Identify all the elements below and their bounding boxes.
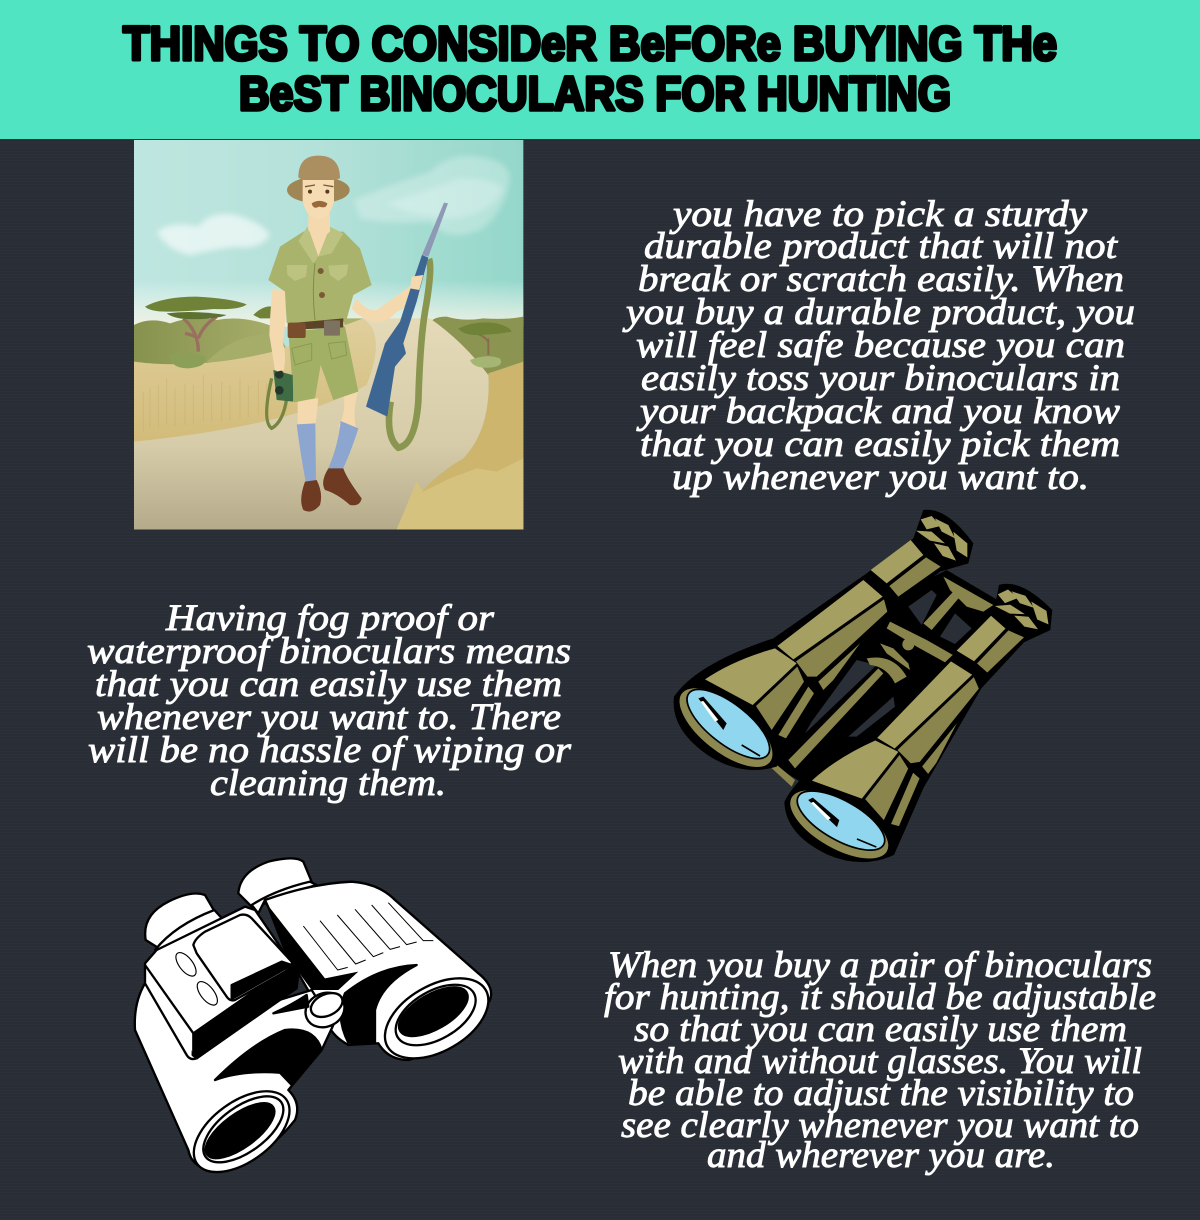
neck and head	[308, 213, 330, 242]
text block: fog proof and waterproof: that you can easily use them	[95, 664, 562, 705]
trees	[145, 297, 512, 368]
legs	[298, 392, 358, 432]
bridge	[770, 570, 1003, 783]
text block: durability: that you can easily pick them	[640, 424, 1120, 465]
shorts	[288, 327, 358, 402]
right lens	[371, 962, 502, 1075]
clouds	[157, 156, 510, 255]
text block: durability	[622, 194, 1135, 498]
title: THINGS TO CONSIDeR BeFORe BUYING THe	[123, 18, 1057, 71]
text block: fog proof and waterproof	[87, 598, 572, 804]
text block: fog proof and waterproof: Having fog proof or	[165, 598, 495, 639]
text block: adjustable: for hunting, it should be adjustable	[604, 977, 1156, 1018]
man	[267, 156, 448, 512]
text block: adjustable: so that you can easily use them	[634, 1009, 1127, 1050]
focus knob	[300, 986, 350, 1034]
shirt	[268, 232, 372, 323]
grass left	[134, 318, 376, 447]
boots	[301, 468, 362, 512]
text block: durability: you buy a durable product, you	[622, 292, 1135, 333]
text block: durability: will feel safe because you can	[636, 325, 1125, 366]
text block: adjustable: see clearly whenever you want to	[621, 1105, 1139, 1146]
belt and pouch	[288, 318, 343, 330]
illustration: hunter on a savanna path	[134, 140, 524, 530]
text block: durability: durable product that will not	[644, 226, 1119, 267]
binoculars in hand	[267, 378, 287, 428]
road	[134, 318, 489, 529]
rifle strap	[389, 259, 430, 448]
text block: durability: break or scratch easily. When	[638, 259, 1124, 300]
left barrel	[666, 510, 973, 783]
title: BeST BINOCULARS FOR HUNTING	[239, 68, 951, 121]
header band	[0, 0, 1200, 139]
left lens	[180, 1075, 304, 1188]
grass right	[397, 362, 523, 529]
text block: fog proof and waterproof: cleaning them.	[210, 763, 446, 804]
title	[122, 18, 1058, 121]
text block: adjustable: and wherever you are.	[707, 1135, 1055, 1176]
illustration: olive binoculars with blue lenses	[674, 510, 1052, 862]
text block: durability: up whenever you want to.	[672, 457, 1089, 498]
text block: adjustable: When you buy a pair of binoculars	[608, 945, 1152, 986]
text block: fog proof and waterproof: waterproof binoculars means	[87, 631, 571, 672]
socks	[297, 421, 358, 483]
right barrel shadow	[341, 965, 417, 1043]
left barrel shadow	[215, 1030, 322, 1085]
text block: durability: easily toss your binoculars in	[641, 358, 1120, 399]
eyecups	[145, 893, 216, 950]
left barrel	[135, 983, 333, 1168]
rifle	[422, 203, 448, 257]
text block: adjustable: with and without glasses. You will	[618, 1041, 1142, 1082]
focus wheel	[867, 657, 907, 683]
text block: durability: your backpack and you know	[636, 391, 1120, 432]
right barrel	[265, 882, 491, 1060]
text block: durability: you have to pick a sturdy	[669, 194, 1088, 235]
hills	[134, 318, 287, 368]
text block: adjustable: be able to adjust the visibility to	[628, 1073, 1134, 1114]
oval buttons	[172, 949, 221, 1008]
text block: fog proof and waterproof: whenever you want to. There	[97, 697, 561, 738]
right barrel	[749, 577, 1087, 886]
cap	[193, 915, 292, 1000]
arm left	[269, 288, 287, 372]
housing	[145, 907, 298, 1059]
grip ribs	[303, 903, 433, 970]
text block: fog proof and waterproof: will be no hassle of wiping or	[88, 730, 572, 771]
arm right	[352, 285, 422, 322]
